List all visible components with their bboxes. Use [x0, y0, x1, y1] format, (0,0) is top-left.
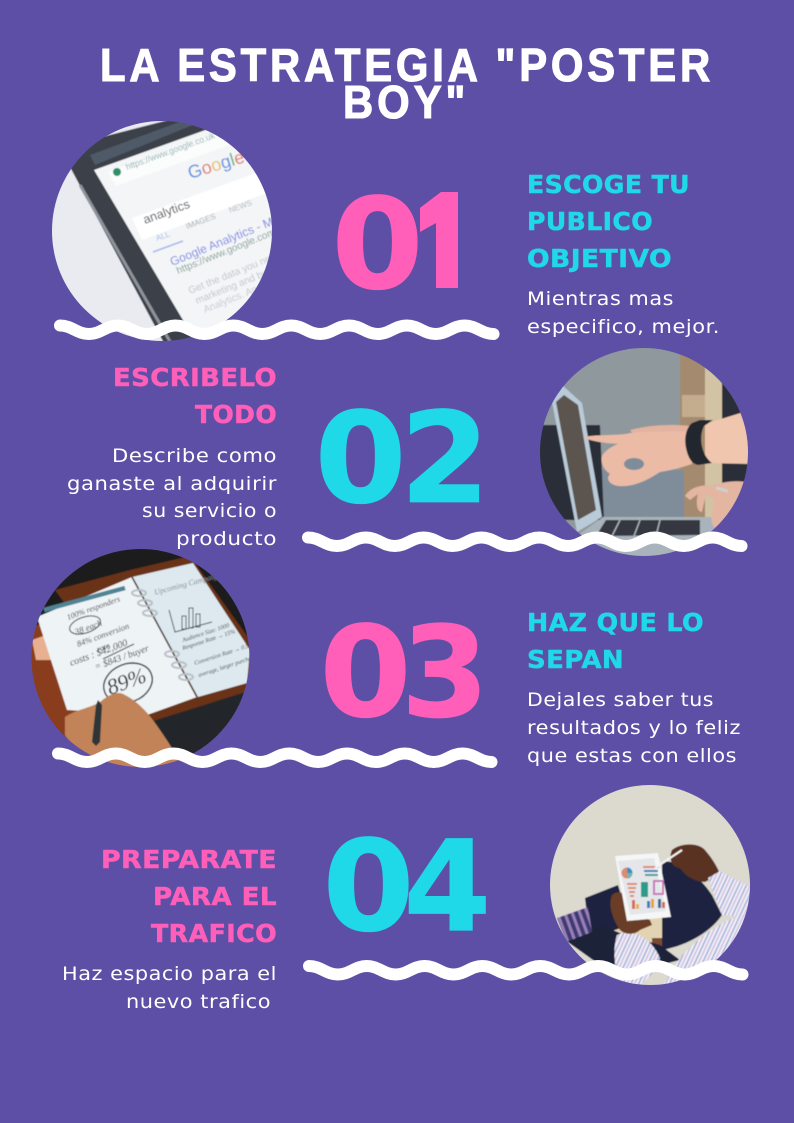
- photo: notebook with handwritten numbers: 89%: [103, 662, 150, 700]
- photo: phone showing Google analytics search: https://www.google.co.uk: [124, 130, 217, 172]
- panel: step 4: [62, 783, 752, 1013]
- photo: phone showing Google analytics search: Analytics. Analytics: [202, 274, 285, 316]
- photo: phone showing Google analytics search: analytics: [141, 197, 192, 227]
- photo: notebook with handwritten numbers: [30, 548, 257, 770]
- body text 1: Mientras mas: [527, 288, 674, 310]
- photo: notebook with handwritten numbers: rate: [96, 641, 111, 654]
- photo: phone showing Google analytics search: IMAGES: [185, 212, 217, 231]
- heading: escoge tu publico objetivo: OBJETIVO: [527, 244, 672, 273]
- heading: preparate para el trafico: PARA EL: [153, 882, 277, 911]
- body text 2: su servicio o: [142, 500, 277, 522]
- number 03: [320, 599, 489, 746]
- wave divider 4: [309, 966, 742, 974]
- heading: escoge tu publico objetivo: [527, 170, 690, 273]
- body text 2: Describe como: [112, 445, 277, 467]
- photo: phone showing Google analytics search: Get the data you need: [187, 250, 283, 297]
- wave divider 3: [58, 754, 491, 762]
- body text 3: [527, 689, 741, 767]
- body text 4: Haz espacio para el: [62, 963, 277, 985]
- number 04: 4: [404, 813, 491, 960]
- number 01: [337, 192, 458, 290]
- panel: step 1: [52, 121, 718, 341]
- photo: notebook with handwritten numbers: 38 each: [72, 618, 104, 637]
- heading: escoge tu publico objetivo: ESCOGE TU: [527, 170, 690, 199]
- photo: notebook with handwritten numbers: Audience Size: 1000: [181, 623, 230, 644]
- title: BOY": [343, 77, 465, 129]
- heading: preparate para el trafico: PREPARATE: [101, 845, 277, 874]
- photo: phone showing Google analytics search: NEWS: [228, 198, 253, 215]
- number 04: 0: [322, 813, 414, 960]
- photo: phone showing Google analytics search: marketing and business: [194, 257, 296, 307]
- body text 2: producto: [176, 528, 277, 550]
- wave divider 1: [60, 326, 493, 334]
- number 03: 3: [401, 599, 489, 746]
- number 02: 2: [400, 385, 490, 532]
- title: [100, 40, 710, 129]
- photo: man holding tablet with charts: [548, 783, 752, 990]
- heading: escribelo todo: TODO: [195, 400, 277, 429]
- photo: notebook with handwritten numbers: Conversion Rate → 0.5%: [194, 642, 254, 667]
- photo: phone showing Google analytics search: [52, 121, 272, 341]
- number 02: [314, 385, 490, 532]
- photo: notebook with handwritten numbers: 100% responders: [66, 594, 121, 622]
- photo: notebook with handwritten numbers: Upcoming Campaign: [153, 570, 222, 597]
- heading: escoge tu publico objetivo: PUBLICO: [527, 207, 653, 236]
- photo: hands pointing at laptop: [538, 346, 750, 558]
- body text 3: resultados y lo feliz: [527, 717, 741, 739]
- number 03: 0: [320, 599, 412, 746]
- heading: haz que lo sepan: SEPAN: [527, 645, 624, 674]
- panel: step 3: [30, 548, 741, 770]
- number 04: [322, 813, 491, 960]
- body text 4: [62, 963, 277, 1013]
- heading: preparate para el trafico: [101, 845, 277, 948]
- heading: escribelo todo: ESCRIBELO: [113, 363, 277, 392]
- heading: haz que lo sepan: [527, 608, 704, 674]
- wave divider 2: [308, 538, 741, 546]
- body text 3: Dejales saber tus: [527, 689, 714, 711]
- number 01: 0: [332, 171, 424, 318]
- photo: notebook with handwritten numbers: costs : $42,000: [68, 638, 129, 669]
- body text 1: [527, 288, 720, 338]
- title: LA ESTRATEGIA "POSTER: [100, 40, 710, 92]
- photo: phone showing Google analytics search: Google: [185, 147, 247, 183]
- heading: preparate para el trafico: TRAFICO: [151, 919, 277, 948]
- photo: notebook with handwritten numbers: 84% conversion: [75, 621, 130, 649]
- body text 2: ganaste al adquirir: [67, 473, 277, 495]
- photo: notebook with handwritten numbers: Response Rate → 15%: [181, 629, 236, 652]
- photo: phone showing Google analytics search: ALL: [155, 229, 172, 243]
- body text 1: especifico, mejor.: [527, 316, 720, 338]
- photo: notebook with handwritten numbers: = $843 / buyer: [93, 643, 151, 673]
- heading: escribelo todo: [113, 363, 277, 429]
- number 02: 0: [314, 385, 406, 532]
- photo: phone showing Google analytics search: https://www.google.com ›: [175, 225, 283, 277]
- heading: haz que lo sepan: HAZ QUE LO: [527, 608, 704, 637]
- body text 2: [67, 445, 277, 550]
- photo: phone showing Google analytics search: Google Analytics - Mobile: [168, 205, 299, 269]
- panel: step 2: [67, 346, 750, 558]
- number 01: 1: [400, 171, 488, 318]
- body text 3: que estas con ellos: [527, 745, 737, 767]
- body text 4: nuevo trafico: [126, 991, 271, 1013]
- photo: notebook with handwritten numbers: average, larger purchase: [198, 654, 257, 679]
